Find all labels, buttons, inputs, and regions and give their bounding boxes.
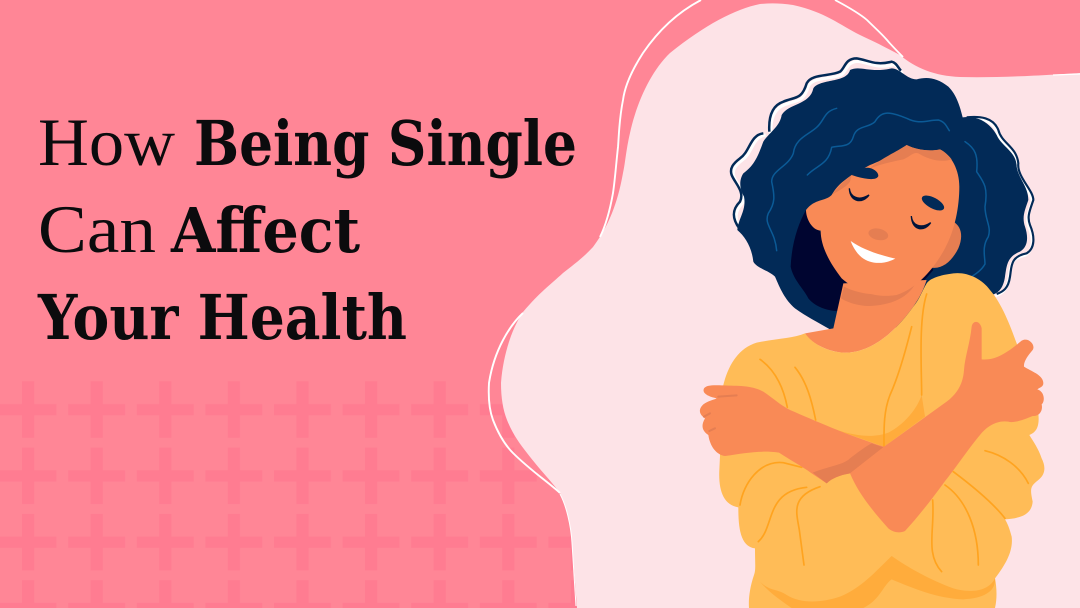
closed eyes bbox=[849, 188, 869, 201]
title line 3: Your Health bbox=[37, 281, 407, 354]
title bbox=[37, 104, 577, 354]
title line 1 bbox=[38, 104, 577, 180]
eyebrows bbox=[852, 168, 878, 179]
title line 1: How bbox=[38, 104, 175, 180]
shadow under hair bbox=[791, 210, 847, 311]
nose bbox=[867, 227, 889, 242]
pale pink blob with white outline strokes bbox=[489, 0, 1080, 608]
sweater and arms bbox=[700, 273, 1044, 608]
title line 2: Can bbox=[38, 191, 156, 267]
hair strands bbox=[767, 108, 989, 277]
sweater shadows bbox=[837, 395, 925, 447]
arm shadow bbox=[813, 443, 883, 483]
finger creases bbox=[704, 395, 737, 431]
sweater fold lines bbox=[740, 294, 1028, 572]
forehead shadow bbox=[870, 145, 952, 168]
right arm and hand bbox=[850, 322, 1044, 532]
hair bbox=[731, 58, 1033, 329]
title line 2 bbox=[38, 191, 360, 267]
neck bbox=[805, 279, 927, 353]
illustration: woman hugging herself bbox=[700, 58, 1044, 608]
neck shadow bbox=[841, 279, 917, 306]
title line 1: Being Single bbox=[194, 107, 577, 180]
plus sign pattern bbox=[0, 381, 590, 608]
smile bbox=[851, 241, 895, 263]
title line 2: Affect bbox=[170, 194, 360, 267]
ear bbox=[927, 222, 961, 268]
face bbox=[806, 145, 961, 296]
sweater bbox=[719, 273, 1044, 608]
left arm and hand bbox=[700, 385, 884, 483]
